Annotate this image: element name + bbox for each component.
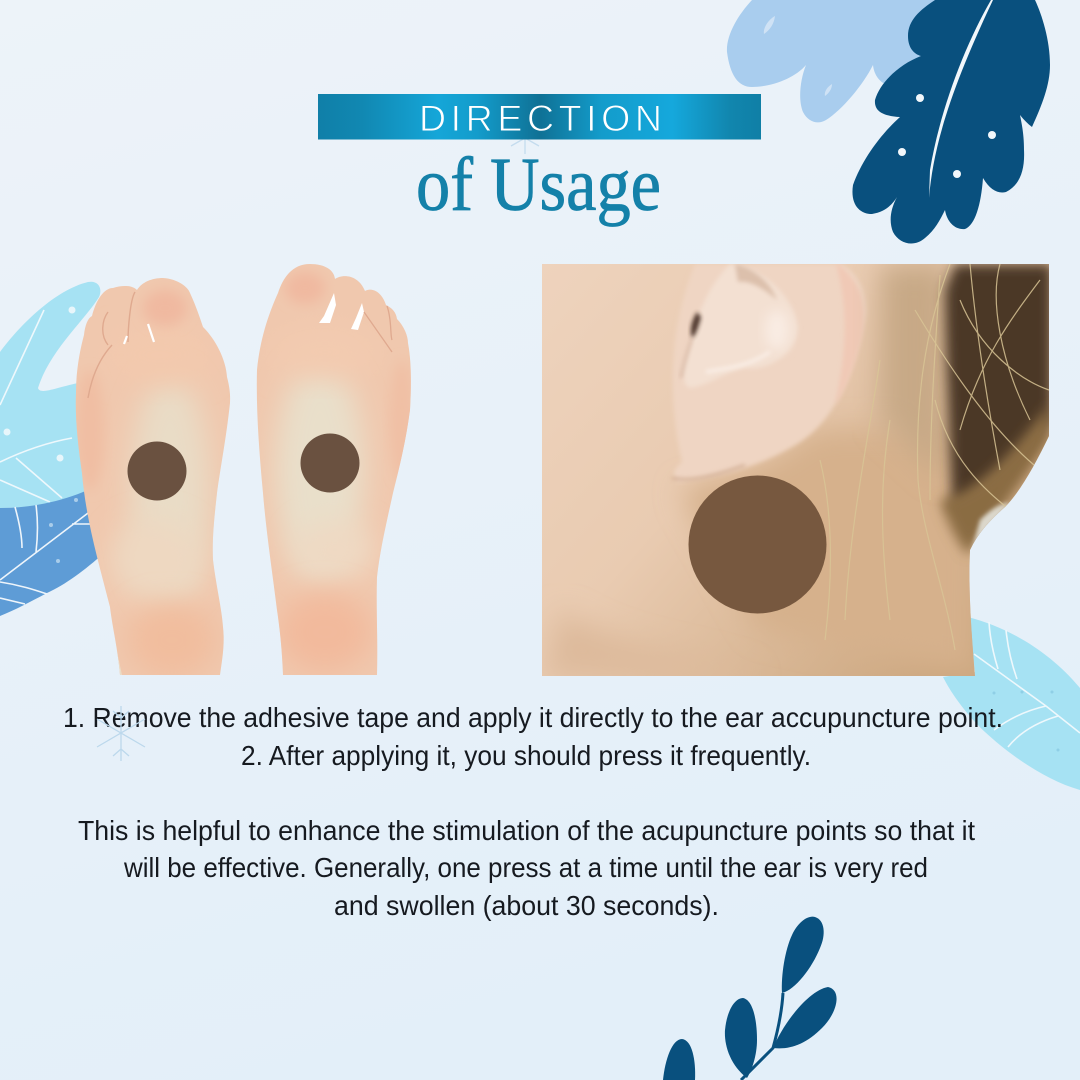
photo: left foot with patch xyxy=(70,270,235,680)
neck shading xyxy=(680,430,975,676)
photo: right foot with patch xyxy=(250,260,415,680)
ear canal xyxy=(691,312,701,338)
body text: explanation xyxy=(78,815,975,921)
ear xyxy=(673,264,866,482)
body text: explanation: This is helpful to enhance the stimulation of the acupuncture points so that it xyxy=(78,815,975,846)
patch on neck xyxy=(688,476,826,614)
hair xyxy=(880,264,950,480)
snowflake behind title xyxy=(511,122,539,154)
patch on left foot xyxy=(128,442,186,500)
leaf: bottom right cyan xyxy=(943,617,1080,790)
photo: ear and neck with patch xyxy=(542,264,1052,676)
leaf: left mid blue xyxy=(0,490,104,616)
title banner xyxy=(318,94,761,140)
title: of Usage: of Usage xyxy=(416,143,661,227)
banner label: DIRECTION xyxy=(419,97,662,139)
snowflake near text xyxy=(97,706,145,761)
patch on right foot xyxy=(300,434,360,492)
leaf: top right dark blue with veins and dots xyxy=(764,0,1050,244)
toe gaps xyxy=(319,293,364,330)
body text: explanation: will be effective. Generally, one press at a time until the ear is very red xyxy=(123,852,928,883)
body text: usage steps xyxy=(63,702,1003,771)
body text: usage steps: 1. Remove the adhesive tape and apply it directly to the ear accupuncture point. xyxy=(63,702,1003,733)
body text: explanation: and swollen (about 30 seconds). xyxy=(334,890,719,921)
leaf: left light cyan xyxy=(0,282,100,508)
jaw crease xyxy=(672,465,745,479)
toe separations xyxy=(88,292,135,398)
leaf: top right light blue xyxy=(727,0,950,122)
body text: usage steps: 2. After applying it, you should press it frequently. xyxy=(241,740,811,771)
sprig: bottom dark leaves xyxy=(663,917,837,1080)
